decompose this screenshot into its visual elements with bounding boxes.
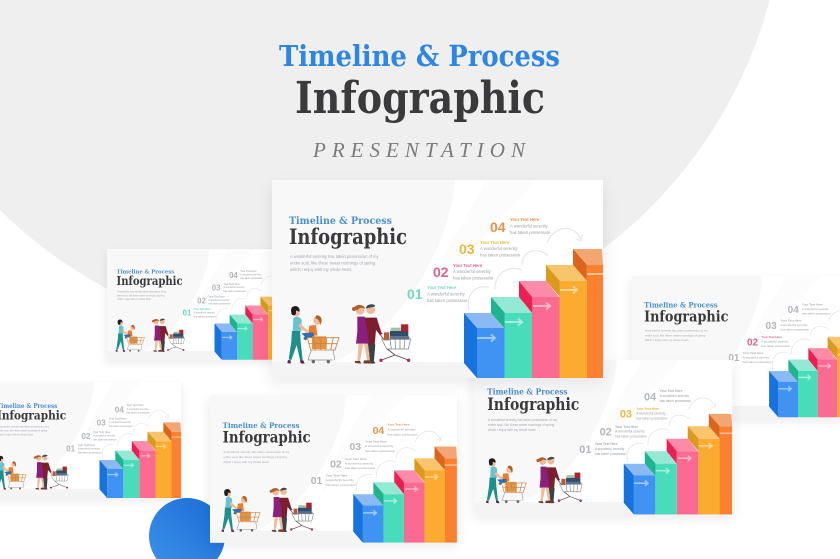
slide heading: Timeline & Process [289,215,392,227]
slide: upper left: Infographic [117,274,183,288]
slide: right: 01 [728,353,740,364]
slide: upper left: 01 [183,309,192,318]
slide: upper left: A wonderful serenity [194,312,216,315]
slide: lower left: Your Text Here [109,418,127,421]
slide: lower left: A wonderful serenity [93,434,116,437]
slide: upper left: A wonderful serenity [223,286,245,289]
slide: bottom centre [209,395,458,547]
slide: bottom centre: Your Text Here [345,457,367,461]
slide: right: has taken possession [802,312,831,316]
slide: upper left: A wonderful serenity [240,274,262,277]
slide: bottom right: Your Text Here [636,407,659,411]
slide: lower left: Your Text Here [126,404,144,407]
slide: bottom centre: Infographic [223,428,311,447]
slide: bottom right: A wonderful serenity [615,430,645,434]
slide: right: A wonderful serenity [743,355,770,359]
slide: lower left: A wonderful serenity [78,448,101,451]
slide: upper left: 02 [197,296,207,305]
step 01 [407,285,468,303]
slide: right: 04 [788,305,799,316]
slide: right: Timeline & Process [644,300,718,309]
slide: bottom right: A wonderful serenity [595,447,625,451]
step 03 [459,240,521,258]
slide: bottom right: has taken possession [615,435,647,439]
slide: lower left: 01 [66,445,76,454]
slide: right: has taken possession [781,328,810,332]
slide: upper left: 03 [212,283,221,292]
slide: lower left: has taken possession [109,425,133,428]
step 03: Your Text Here [480,240,510,245]
slide: bottom right: 01 [579,444,591,456]
slide: lower left: Your Text Here [78,444,96,447]
slide: upper left: has taken possession [194,315,217,318]
step 01: A wonderful serenity [427,292,466,296]
slide: bottom centre: has taken possession [388,432,418,436]
slide: lower left: A wonderful serenity [109,421,132,424]
step 04: 04 [490,219,506,235]
slide body text: entire soul, like these sweet mornings of spring [290,260,376,266]
slide: bottom centre: which I enjoy with my whole heart. [223,460,270,464]
slide: bottom right: Your Text Here [660,389,683,393]
slide: lower left: 04 [115,405,124,414]
step 03: A wonderful serenity [480,246,519,251]
step 03: 03 [459,241,475,257]
slide: right: 03 [766,321,777,332]
title: Infographic: Infographic [295,73,545,124]
slide: bottom centre: A wonderful serenity [345,461,374,465]
slide: main centre [270,180,605,384]
slide: bottom right: has taken possession [636,417,668,421]
slide: upper left: A wonderful serenity [208,299,230,302]
step 02 [433,263,494,280]
slide: bottom right: has taken possession [595,452,626,456]
staircase chart [464,249,603,378]
slide: right: Your Text Here [743,351,764,355]
slide: upper left: Timeline & Process [117,269,175,276]
slide title: Infographic [289,224,407,249]
slide: bottom right [472,360,734,519]
slide: lower left: has taken possession [78,451,102,454]
slide: upper left: has taken possession [208,303,232,306]
slide: bottom right: 02 [600,427,612,439]
slide: right: A wonderful serenity [802,307,829,311]
slide: bottom centre: 03 [350,442,361,453]
slide: bottom centre: Your Text Here [388,423,410,427]
slide: right: Infographic [644,308,728,326]
slide: upper left: has taken possession [223,290,247,293]
slide: bottom right: 03 [620,409,632,421]
slide: right: A wonderful serenity [761,339,789,343]
slide: lower left: A wonderful serenity [126,408,149,411]
slide: bottom right: A wonderful serenity [636,412,666,416]
slide: bottom centre: has taken possession [365,449,395,453]
slide: upper left: which I enjoy with my whole heart. [117,298,152,301]
slide: bottom centre: entire soul, like these sweet mornings of spring [223,455,287,459]
slide body text: which I enjoy with my whole heart. [290,267,352,272]
slide: upper left: Your Text Here [223,283,240,286]
slide: upper left: 04 [229,271,238,280]
slide: upper left: A wonderful serenity has taken possession of my [117,291,167,294]
slide: bottom right: which I enjoy with my whole heart. [488,428,537,432]
slide: bottom centre: Timeline & Process [223,421,300,430]
step 04: A wonderful serenity [510,224,549,228]
step 01: has taken possession [427,298,468,303]
slide: bottom centre: Your Text Here [326,473,348,477]
step 02: has taken possession [453,276,494,280]
step 03: has taken possession [480,252,521,258]
slide: upper left: Your Text Here [208,296,225,299]
slide: bottom centre: 04 [373,426,384,437]
slide: bottom centre: has taken possession [345,466,375,470]
slide: bottom centre: has taken possession [326,483,356,487]
slide: bottom centre: A wonderful serenity [388,427,416,431]
slide: bottom centre: 02 [330,459,342,470]
slide: upper left: Your Text Here [194,308,211,311]
slide: bottom centre: A wonderful serenity has taken possession of my [223,450,290,454]
step 01: Your Text Here [427,285,457,290]
shoppers illustration [287,304,411,364]
slide: bottom right: 04 [644,392,656,404]
slide: right [631,276,840,422]
step 02: Your Text Here [453,263,483,268]
slide: right: Your Text Here [802,302,823,306]
slide: upper left: Your Text Here [240,270,257,273]
slide: right: A wonderful serenity [781,323,808,327]
step 02: 02 [433,264,449,280]
slide: bottom right: Your Text Here [615,425,638,429]
slide: bottom right: A wonderful serenity has taken possession of my [488,418,557,422]
slide: right: 02 [747,337,759,348]
step 04: has taken possession [510,230,551,235]
slide: bottom centre: A wonderful serenity [365,444,394,448]
step 04 [490,217,551,235]
slide: right: has taken possession [743,360,772,364]
slide: upper left: entire soul, like these sweet mornings of spring [117,294,165,297]
slide: bottom right: entire soul, like these sweet mornings of spring [488,423,555,427]
blue circle [149,498,225,559]
slide: lower left: Your Text Here [93,431,111,434]
slide: bottom right: Timeline & Process [487,386,568,396]
step 01: 01 [407,286,423,302]
slide: upper left [106,249,272,364]
slide: lower left: 03 [97,418,106,427]
slide body text: A wonderful serenity has taken possession of my [290,254,379,259]
slide: bottom centre: 01 [311,476,323,487]
curved arrows [468,228,582,311]
slide: bottom right: Infographic [487,395,579,414]
title: Timeline & Process: Timeline & Process [279,39,560,73]
slide: upper left: has taken possession [240,277,264,280]
step 04: Your Text Here [510,217,540,222]
slide: right: Your Text Here [781,319,802,323]
slide body text [290,254,379,272]
slide: right: A wonderful serenity has taken possession of my [645,329,708,333]
slide: bottom right: A wonderful serenity [660,394,689,398]
slide: right: Your Text Here [761,335,782,339]
slide: lower left: has taken possession [93,438,117,441]
slide: right: which I enjoy with my whole heart. [645,338,689,342]
step 02: A wonderful serenity [453,269,492,274]
slide: bottom right: has taken possession [660,399,691,403]
slide: bottom centre: Your Text Here [365,440,387,444]
slide: right: has taken possession [761,344,790,348]
slide: lower left [0,382,182,502]
slide: right: entire soul, like these sweet mornings of spring [645,333,706,337]
subtitle: PRESENTATION: PRESENTATION [312,138,526,162]
slide: bottom centre: A wonderful serenity [326,478,354,482]
slide: bottom right: Your Text Here [595,442,618,446]
background circle [0,0,785,343]
slide: lower left: 02 [81,432,91,441]
slide: lower left: has taken possession [126,412,151,415]
